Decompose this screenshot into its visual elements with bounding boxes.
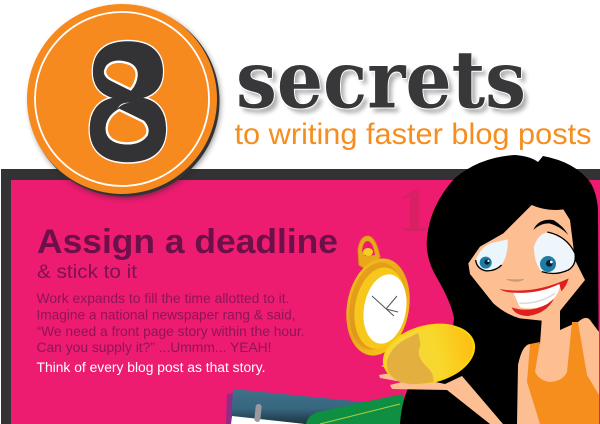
body text: Imagine a national newspaper rang & said,: [36, 308, 296, 322]
badge shadow: [30, 8, 220, 198]
subtitle: to writing faster blog posts: [234, 118, 592, 151]
subheading: & stick to it: [37, 262, 138, 283]
body text: Can you supply it?” ...Ummm... YEAH!: [36, 340, 272, 355]
body text: Work expands to fill the time allotted to it.: [36, 291, 290, 306]
illustration: green book: [306, 394, 412, 424]
right eye: [534, 232, 575, 274]
title: secrets: secrets: [240, 37, 530, 131]
illustration: pocket watch: [339, 236, 482, 394]
watch loop: [358, 236, 380, 272]
highlighted text: Think of every blog post as that story.: [36, 360, 266, 375]
hand: [379, 363, 503, 424]
watch case: [339, 253, 417, 361]
watch hands: [372, 296, 398, 316]
hinge: [386, 335, 404, 355]
face: [468, 205, 585, 321]
illustration: notebook: [226, 389, 364, 424]
nose: [507, 279, 524, 281]
left eye: [476, 239, 508, 271]
title: secrets: secrets: [236, 32, 526, 126]
smile: [499, 278, 569, 316]
body text: [36, 291, 304, 355]
heading: Assign a deadline: Assign a deadline: [37, 223, 338, 261]
badge: 8: [27, 4, 220, 198]
illustration: woman: [379, 155, 599, 424]
numeral: 8: [83, 10, 173, 198]
body text: “We need a front page story within the hour.: [36, 324, 304, 339]
watch lid: [376, 314, 482, 394]
arm and body: [517, 305, 599, 424]
ghost step number: 1: [398, 177, 429, 245]
watch face: [358, 271, 412, 347]
eyebrow: [533, 220, 568, 235]
numeral counters: [105, 44, 152, 159]
hair: [400, 155, 599, 424]
